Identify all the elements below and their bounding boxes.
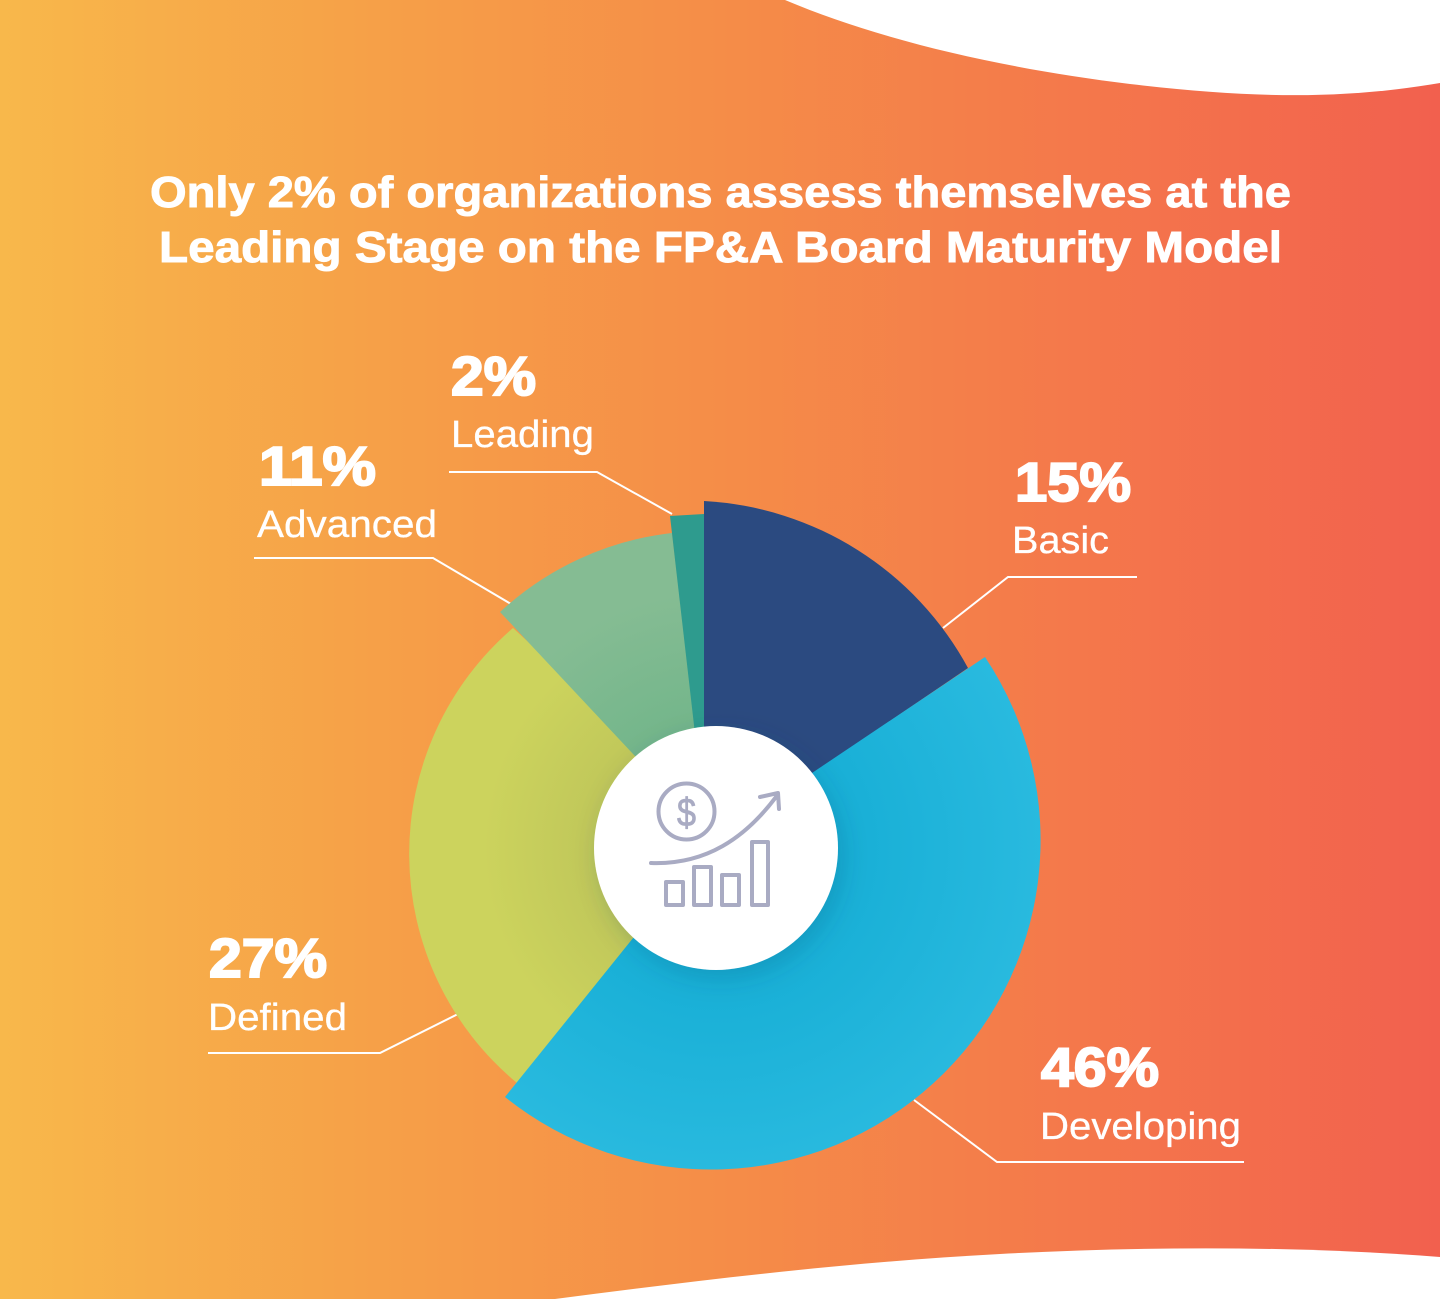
label: Advanced: 11% [259, 435, 376, 497]
slice: Defined 27% [409, 628, 700, 1083]
icon: dollar and growth chart [651, 784, 779, 905]
label: Advanced [257, 435, 437, 546]
bottom white wave [555, 1248, 1440, 1299]
label: Defined [208, 927, 347, 1039]
label: Developing: Developing [1040, 1106, 1241, 1148]
slice: Basic 15% [704, 501, 968, 847]
slice: Advanced 11% [500, 533, 708, 834]
label: Leading [451, 345, 594, 456]
pie chart [409, 501, 1041, 1170]
title: Leading Stage on the FP&A Board Maturity Model [159, 223, 1282, 272]
leader lines [208, 472, 1244, 1162]
label: Basic [1012, 451, 1131, 562]
top white wave [785, 0, 1440, 95]
icon: growth arrow [651, 793, 779, 863]
icon: dollar coin: $ [677, 791, 696, 835]
title [150, 168, 1291, 272]
label: Advanced: Advanced [257, 504, 437, 546]
title: Only 2% of organizations assess themselves at the [150, 168, 1291, 217]
icon: bars [666, 842, 768, 905]
slice: Developing 46% [505, 657, 1041, 1170]
label: Leading: 2% [451, 345, 536, 407]
label: Leading: Leading [451, 414, 594, 456]
label: Defined: Defined [208, 997, 347, 1039]
label: Defined: 27% [209, 927, 327, 989]
slice: Leading 2% [670, 514, 704, 760]
label: Basic: Basic [1012, 520, 1109, 562]
label: Basic: 15% [1015, 451, 1131, 513]
center white circle [594, 726, 838, 970]
label: Developing: 46% [1041, 1036, 1159, 1098]
label: Developing [1040, 1036, 1241, 1148]
